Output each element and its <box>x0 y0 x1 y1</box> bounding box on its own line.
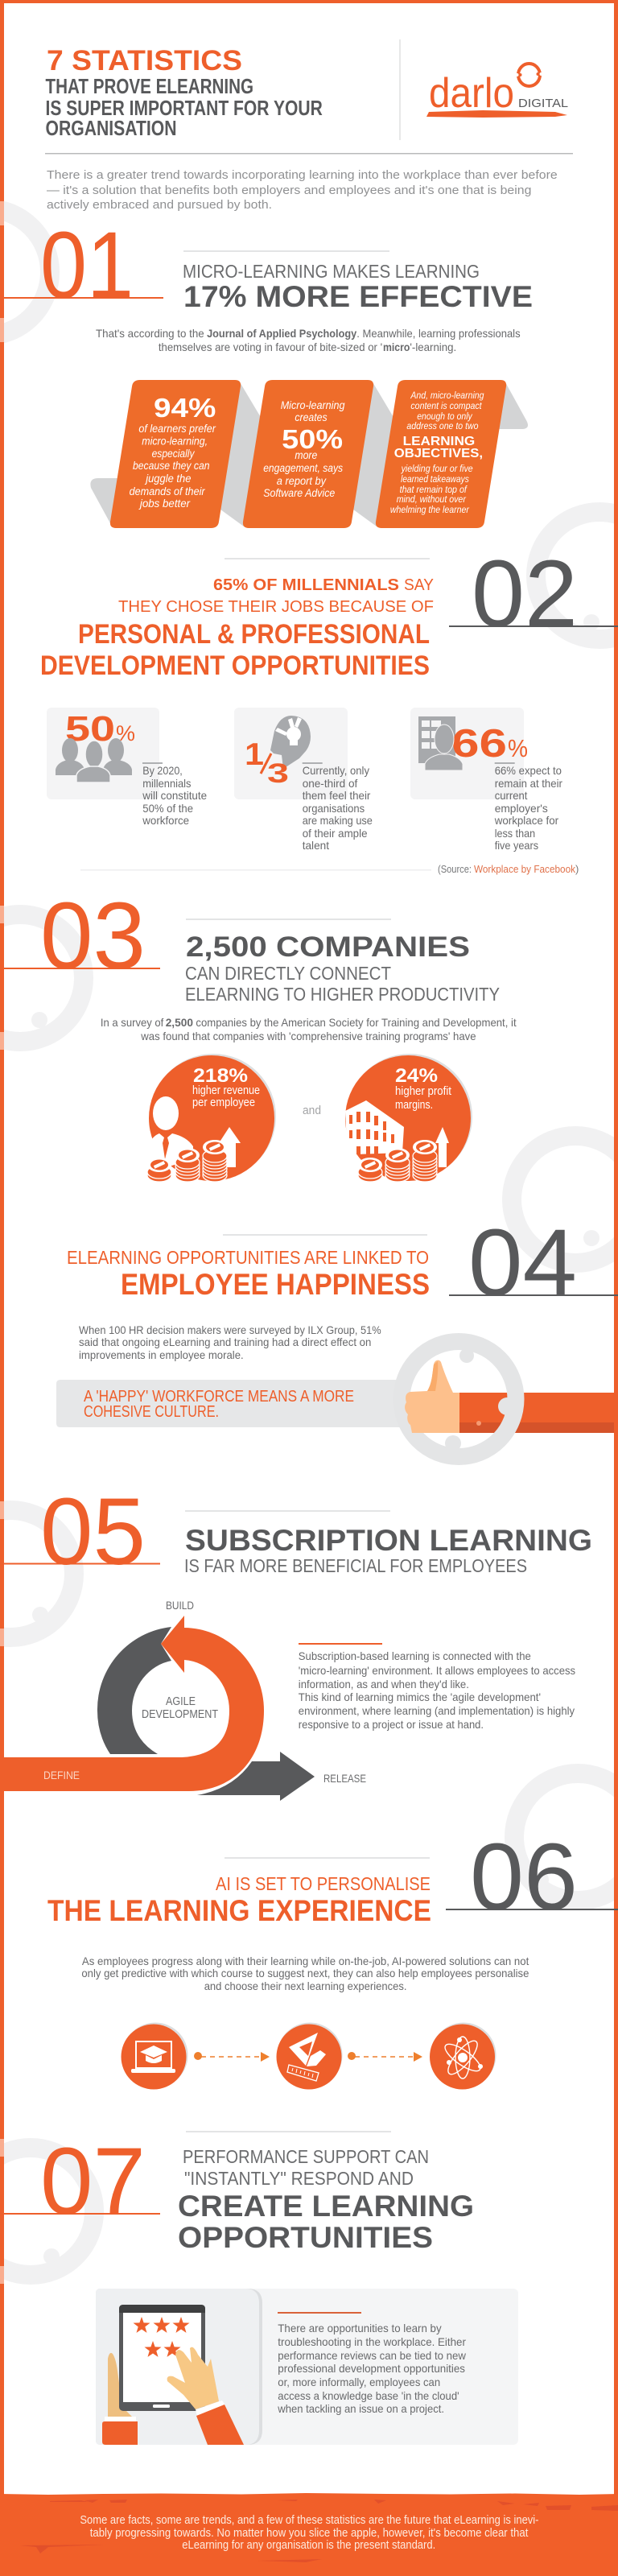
section 03 text <box>101 1016 517 1042</box>
section 03 heading: 2,500 COMPANIES <box>186 931 470 963</box>
panel: 66% expect: less than <box>495 827 535 840</box>
section 01 heading: 17% MORE EFFECTIVE <box>183 280 533 313</box>
panel: one-third talent: of their ample <box>303 827 368 840</box>
card: 94% of learners: 94% <box>154 393 216 423</box>
section 06 text: and choose their next learning experiences. <box>204 1979 407 1992</box>
card: 50% more engagement: Micro-learning <box>281 399 345 411</box>
section 07 heading: PERFORMANCE SUPPORT CAN <box>183 2146 429 2167</box>
card: learning objectives: content is compact <box>410 400 482 411</box>
title: 7 STATISTICS <box>47 45 242 76</box>
logo: darlo digital: DIGITAL <box>518 97 568 110</box>
panel: 66% expect <box>410 708 562 852</box>
panel: performance support: access a knowledge base 'in the cloud' <box>278 2389 459 2402</box>
section 01 text: Journal of Applied Psychology <box>207 327 356 340</box>
section 06 number: 06 <box>470 1824 578 1930</box>
section 01 text <box>96 327 521 353</box>
section 06 text <box>81 1955 529 1992</box>
card: 94% of learners <box>110 380 241 528</box>
section 07 heading: OPPORTUNITIES <box>178 2221 433 2254</box>
source note: Workplace by Facebook <box>474 863 575 875</box>
agile cycle diagram: DEVELOPMENT <box>142 1707 218 1721</box>
section 05 text <box>299 1649 575 1731</box>
section 01 text: micro <box>383 341 410 353</box>
section 02 heading: DEVELOPMENT OPPORTUNITIES <box>40 650 430 681</box>
section 02 heading: 65% OF MILLENNIALS <box>213 576 399 594</box>
card: 50% more engagement: creates <box>295 411 328 423</box>
callout: happy workforce: COHESIVE CULTURE. <box>84 1403 219 1421</box>
panel: one-third talent: Currently, only <box>303 764 369 777</box>
panel: 50% millennials: 50% of the <box>142 802 193 815</box>
section 03 heading <box>185 931 500 1005</box>
agile cycle diagram: BUILD <box>166 1599 194 1612</box>
section 07 number: 07 <box>40 2128 146 2235</box>
title <box>45 45 323 140</box>
panel: one-third talent: them feel their <box>303 789 371 802</box>
footer band: tably progressing towards. No matter how you slice the apple, however, it's become clear that <box>90 2527 528 2540</box>
icon: thumbs up in ring <box>402 1341 614 1457</box>
card: 50% more engagement: a report by <box>277 475 327 487</box>
intro text <box>47 168 558 212</box>
circle: 218% higher revenue: higher revenue <box>192 1084 260 1097</box>
agile cycle diagram: RELEASE <box>323 1772 366 1785</box>
panel: 66% expect: remain at their <box>495 777 562 790</box>
panel: 66% expect: employer's <box>495 802 548 815</box>
section 01 number: 01 <box>40 213 134 319</box>
section 05 heading <box>184 1524 592 1576</box>
card: 50% more engagement: engagement, says <box>263 462 343 474</box>
section 03 text: companies by the American Society for Training and Development, it <box>196 1016 517 1029</box>
card: 94% of learners: juggle the <box>144 473 192 485</box>
section 06 heading: AI IS SET TO PERSONALISE <box>216 1873 431 1894</box>
card: 50% more engagement: more <box>295 449 317 461</box>
callout: happy workforce: A 'HAPPY' WORKFORCE MEANS A MORE <box>84 1388 354 1406</box>
circle: 218% higher revenue <box>147 1054 276 1182</box>
section 02 heading: PERSONAL & PROFESSIONAL <box>78 619 430 650</box>
agile cycle diagram <box>0 1599 366 1801</box>
card: 94% of learners: of learners prefer <box>138 423 216 435</box>
section 05 heading: IS FAR MORE BENEFICIAL FOR EMPLOYEES <box>184 1555 527 1576</box>
card: learning objectives: learned takeaways <box>401 473 469 485</box>
panel: 50% millennials: By 2020, <box>142 764 183 777</box>
card: 94% of learners: micro-learning, <box>142 436 208 448</box>
section 01 text: . Meanwhile, learning professionals <box>356 327 521 340</box>
panel: 66% expect: 66% expect to <box>495 764 562 777</box>
folded ribbon shadows <box>90 381 528 526</box>
section 02 number: 02 <box>472 541 578 647</box>
panel: 66% expect: workplace for <box>494 814 558 827</box>
panel: one-third talent <box>234 708 373 852</box>
section 03 text: 2,500 <box>166 1016 193 1029</box>
panel: performance support: troubleshooting in the workplace. Either <box>278 2335 466 2348</box>
agile cycle diagram: AGILE <box>166 1695 196 1708</box>
source note: (Source: <box>438 863 472 875</box>
card: learning objectives <box>376 380 506 528</box>
logo: darlo digital <box>426 64 568 118</box>
section 01 text: That's according to the <box>96 327 204 340</box>
connector word: and <box>303 1104 321 1117</box>
section 02 heading: SAY <box>404 576 434 594</box>
panel: performance support: There are opportunities to learn by <box>278 2322 442 2334</box>
icon: right hand tapping <box>167 2347 244 2445</box>
panel: performance support <box>96 2289 518 2445</box>
circle: 24% higher profit <box>345 1054 472 1182</box>
circle: 24% higher profit: higher profit <box>395 1085 451 1098</box>
card: learning objectives: that remain top of <box>400 484 468 495</box>
section 03 heading: ELEARNING TO HIGHER PRODUCTIVITY <box>185 984 500 1005</box>
card: 94% of learners: because they can <box>133 460 209 472</box>
card: learning objectives: enough to only <box>417 411 473 422</box>
footer band: Some are facts, some are trends, and a few of these statistics are the future that eLearning is inevi- <box>80 2514 539 2527</box>
circle: 218% higher revenue: per employee <box>192 1096 255 1109</box>
section 05 text: This kind of learning mimics the 'agile development' <box>299 1690 541 1703</box>
section 07 heading <box>178 2146 474 2254</box>
panel: 66% expect: five years <box>495 839 538 852</box>
icon: laptop with graduation cap <box>121 2022 188 2090</box>
card: 94% of learners: especially <box>152 448 196 460</box>
card: learning objectives: OBJECTIVES, <box>394 447 483 460</box>
panel: performance support: performance reviews can be tied to new <box>278 2349 467 2362</box>
panel: performance support: professional development opportunities <box>278 2362 465 2375</box>
title: IS SUPER IMPORTANT FOR YOUR <box>45 96 323 120</box>
section 05 text: Subscription-based learning is connected with the <box>299 1649 531 1662</box>
panel: 66% expect: current <box>495 789 527 802</box>
card: 50% more engagement <box>243 380 373 528</box>
circle: 24% higher profit: margins. <box>395 1099 433 1112</box>
section 06 heading: THE LEARNING EXPERIENCE <box>47 1894 431 1927</box>
arrow: dashed connector one <box>194 2052 270 2062</box>
section 01 heading: MICRO-LEARNING MAKES LEARNING <box>183 261 480 282</box>
footer band: eLearning for any organisation is the present standard. <box>182 2539 435 2552</box>
intro text: — it's a solution that benefits both employers and employees and it's one that is being <box>47 184 531 197</box>
section 04 number: 04 <box>468 1210 577 1316</box>
panel: one-third talent: 3 <box>267 758 289 789</box>
circle: 218% higher revenue: 218% <box>193 1065 248 1087</box>
card: learning objectives: yielding four or five <box>401 463 473 474</box>
panel: 50% millennials <box>47 708 207 827</box>
section 05 text: environment, where learning (and implementation) is highly <box>299 1704 575 1717</box>
section 07 heading: "INSTANTLY" RESPOND AND <box>184 2168 414 2189</box>
panel: one-third talent: organisations <box>303 802 365 815</box>
card: learning objectives: mind, without over <box>397 493 467 505</box>
section 07 heading: CREATE LEARNING <box>178 2190 474 2223</box>
footer band <box>0 2493 618 2576</box>
section 02 heading <box>40 576 434 681</box>
section 03 heading: CAN DIRECTLY CONNECT <box>185 963 391 984</box>
section 06 text: As employees progress along with their learning while on-the-job, AI-powered solutions can not <box>82 1955 529 1967</box>
card: 94% of learners: demands of their <box>130 485 205 497</box>
section 05 text: responsive to a project or issue at hand. <box>299 1718 484 1731</box>
section 01 heading <box>183 261 533 313</box>
panel: one-third talent: one-third of <box>303 777 357 790</box>
circle: 24% higher profit: 24% <box>395 1065 438 1087</box>
section 02 heading: THEY CHOSE THEIR JOBS BECAUSE OF <box>118 598 434 616</box>
panel: 50% millennials: millennials <box>142 777 192 790</box>
panel: performance support: or, more informally, employees can <box>278 2376 440 2388</box>
section 04 heading: ELEARNING OPPORTUNITIES ARE LINKED TO <box>67 1247 429 1268</box>
section 03 text: In a survey of <box>101 1016 163 1029</box>
panel: 50% millennials: will constitute <box>142 789 207 802</box>
agile cycle diagram: DEFINE <box>43 1769 80 1781</box>
icon: left hand holding tablet <box>102 2353 138 2445</box>
section 04 text: When 100 HR decision makers were surveyed by ILX Group, 51% <box>79 1323 381 1336</box>
icon: tablet with star rating <box>119 2305 205 2411</box>
source note: ) <box>575 863 579 875</box>
card: learning objectives: whelming the learner <box>390 504 470 515</box>
section 04 heading: EMPLOYEE HAPPINESS <box>121 1268 430 1301</box>
panel: 50% millennials: % <box>116 721 135 745</box>
section 06 text: only get predictive with which course to suggest next, they can also help employees personalise <box>81 1967 529 1979</box>
panel: performance support: when tackling an issue on a project. <box>277 2402 444 2415</box>
panel: 66% expect: 66 <box>451 722 507 766</box>
section 04 text <box>79 1323 381 1361</box>
panel: 50% millennials: workforce <box>142 814 189 827</box>
card: 50% more engagement: Software Advice <box>263 487 335 499</box>
section 05 number: 05 <box>40 1479 146 1585</box>
card: 50% more engagement: 50% <box>282 424 343 454</box>
section 04 text: said that ongoing eLearning and training had a direct effect on <box>79 1335 371 1348</box>
section 05 text: 'micro-learning' environment. It allows employees to access <box>299 1664 575 1677</box>
icon: atom <box>430 2022 496 2090</box>
title: THAT PROVE ELEARNING <box>45 74 253 98</box>
section 03 number: 03 <box>40 883 146 989</box>
panel: one-third talent: are making use <box>303 814 373 827</box>
title: ORGANISATION <box>45 116 177 140</box>
arrow: dashed connector two <box>348 2052 422 2062</box>
section 03 text: was found that companies with 'comprehensive training programs' have <box>140 1030 476 1042</box>
card: 94% of learners: jobs better <box>138 497 191 510</box>
intro text: There is a greater trend towards incorporating learning into the workplace than ever before <box>47 168 558 182</box>
card: learning objectives: LEARNING <box>403 435 475 448</box>
card: learning objectives: And, micro-learning <box>410 390 484 401</box>
panel: 50% millennials: 50 <box>65 709 115 749</box>
callout: happy workforce <box>56 1380 400 1427</box>
section 01 text: themselves are voting in favour of bite-sized or ' <box>159 341 382 353</box>
section 05 heading: SUBSCRIPTION LEARNING <box>185 1524 592 1557</box>
section 04 text: improvements in employee morale. <box>79 1348 244 1361</box>
icon: set square, pencil and ruler <box>277 2022 343 2090</box>
section 04 heading <box>67 1247 430 1301</box>
panel: one-third talent: talent <box>303 839 329 852</box>
panel: 66% expect: % <box>508 734 528 762</box>
section 06 heading <box>47 1873 431 1927</box>
intro text: actively embraced and pursued by both. <box>47 198 272 212</box>
section 01 text: '-learning. <box>410 341 456 353</box>
logo: darlo digital: darlo <box>429 70 514 117</box>
panel: one-third talent: 1 <box>245 737 264 772</box>
section 05 text: information, as and when they'd like. <box>299 1678 469 1690</box>
card: learning objectives: address one to two <box>406 420 479 431</box>
